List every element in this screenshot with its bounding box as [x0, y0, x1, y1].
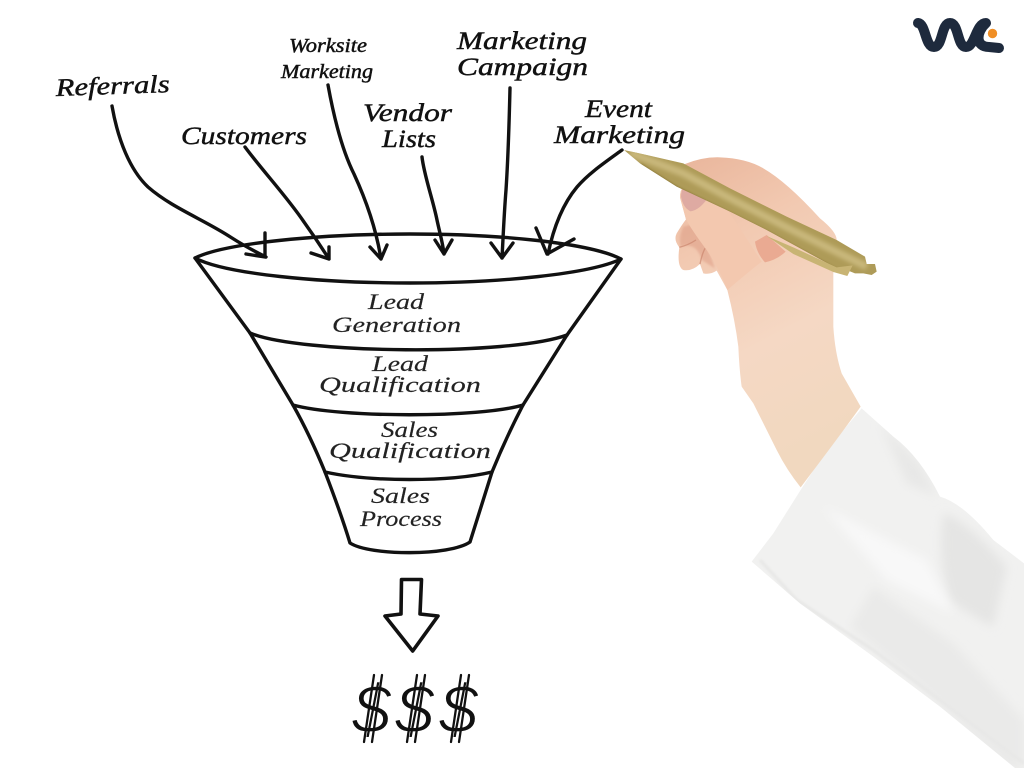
hand and wrist: [675, 157, 861, 487]
stage label: Sales Process: Process: [359, 506, 442, 531]
hand holding pen: [624, 150, 877, 487]
source label: Event Marketing: Marketing: [553, 122, 685, 149]
funnel: [195, 234, 621, 553]
source label: Event Marketing: Event: [584, 96, 653, 123]
arrow: Vendor Lists to funnel: [422, 157, 452, 254]
source label: Worksite Marketing: Marketing: [280, 61, 373, 83]
stage label: Sales Qualification: Qualification: [329, 438, 491, 463]
dollar sign 2: $: [394, 670, 435, 748]
block down arrow: [385, 580, 438, 651]
stage label: Lead Qualification: Lead: [371, 351, 429, 376]
dollar sign 3: $: [438, 670, 479, 748]
funnel sides: [195, 258, 621, 553]
arrow: Event Marketing to funnel: [536, 150, 622, 254]
pen clip: [767, 236, 853, 276]
sleeve folds and shading: [866, 461, 1022, 762]
logo: [918, 23, 999, 48]
finger creases: [679, 240, 705, 264]
finger shading: [680, 223, 715, 268]
source label: Vendor Lists: Lists: [381, 126, 436, 153]
stage label: Lead Qualification: Qualification: [319, 372, 481, 397]
stage label: Lead Generation: Lead: [367, 289, 425, 314]
pen body: [624, 150, 877, 275]
dollar signs: [351, 670, 479, 748]
thumb: [680, 181, 762, 290]
funnel rim ellipse: [195, 234, 621, 283]
stage label: Sales Qualification: Sales: [381, 417, 438, 442]
source label: Marketing Campaign: Marketing: [456, 28, 587, 55]
sleeve fabric: [752, 408, 1024, 768]
thumbnail: [681, 182, 709, 211]
logo wave mark: [918, 23, 999, 48]
stage label: Sales Process: Sales: [371, 483, 430, 508]
source label: Customers: Customers: [181, 123, 307, 150]
source label: Marketing Campaign: Campaign: [457, 54, 588, 81]
arrow: Marketing Campaign to funnel: [491, 88, 513, 258]
arrow: Referrals to funnel: [112, 106, 266, 257]
pen: [624, 150, 877, 276]
source label: Vendor Lists: Vendor: [363, 100, 452, 127]
dollar sign 1: $: [351, 670, 392, 748]
logo orange dot: [988, 29, 997, 38]
lower finger under pen: [755, 235, 786, 262]
arrow: Customers to funnel: [245, 147, 329, 259]
source label: Referrals: Referrals: [54, 71, 170, 102]
arrow: Worksite Marketing to funnel: [328, 85, 387, 259]
funnel dividers: [250, 333, 567, 480]
pen shading: [630, 153, 867, 272]
source label: Worksite Marketing: Worksite: [289, 35, 367, 57]
sleeve: [752, 408, 1024, 768]
stage label: Lead Generation: Generation: [332, 312, 461, 337]
